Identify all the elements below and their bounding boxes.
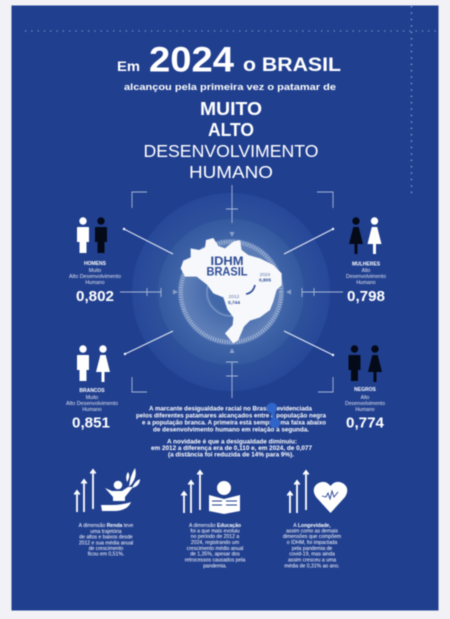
title: Em: [117, 59, 140, 74]
description: [79, 523, 133, 558]
overlay dots: [267, 403, 280, 428]
group: homens: 0,802: [76, 288, 114, 305]
icon: rising arrows: [287, 471, 309, 513]
connector lines: [124, 229, 333, 355]
map label: [206, 256, 248, 278]
text block: racial inequality: de desenvolvimento humano em relação à segunda.: [153, 426, 309, 434]
icon: heart with pulse: [314, 482, 347, 513]
description: pela pandemia de: [292, 546, 332, 552]
description: ficou em 0,51%.: [88, 552, 124, 558]
description: dimensões que compõem: [283, 534, 341, 540]
group: brancos: Muito: [86, 395, 98, 401]
dimension: educação: [181, 471, 245, 570]
2012 value: 0,744: [228, 300, 240, 306]
description: média de 0,31% ao ano.: [284, 564, 340, 570]
description: A Longevidade,: [293, 523, 331, 529]
2024 value: 0,805: [259, 278, 271, 284]
group: mulheres: Desenvolvimento: [346, 274, 386, 280]
description: uma trajetória: [90, 529, 122, 535]
description: o IDHM, foi impactada: [287, 540, 337, 546]
title: 2024: [149, 40, 235, 80]
icon: woman and woman: [349, 217, 382, 254]
icon: hand with plant: [101, 468, 140, 511]
2024 value: 2024: [260, 272, 271, 278]
headline: muito alto desenvolvimento humano: HUMANO: [189, 162, 273, 182]
description: [185, 523, 245, 570]
target rings chart: [120, 185, 343, 398]
group: brancos: BRANCOS: [79, 388, 105, 394]
text block: racial inequality: pelos diferentes patamares alcançados entre a população negra: [136, 412, 327, 420]
group: brancos: 0,851: [72, 414, 110, 432]
headline: muito alto desenvolvimento humano: ALTO: [208, 120, 254, 140]
2012 value: 2012: [229, 294, 240, 300]
icon: rising arrows: [74, 470, 96, 512]
icon: white man and woman: [77, 345, 110, 382]
icon: man and man: [77, 217, 107, 253]
group: homens: Humano: [85, 280, 105, 286]
description: pandemia.: [203, 564, 227, 570]
group: negros: Desenvolvimento: [345, 401, 385, 407]
growth arrow: [246, 285, 255, 294]
subtitle: alcançou pela primeira vez o patamar de: [124, 82, 336, 93]
group: mulheres: Alto: [362, 268, 371, 274]
headline: muito alto desenvolvimento humano: [144, 99, 318, 182]
description: 2024, registrando um: [191, 540, 239, 546]
2012 value: [228, 294, 240, 306]
title: [117, 40, 341, 93]
description: covid-19, mas ainda: [289, 552, 335, 558]
description: retrocessos causados pela: [185, 558, 245, 564]
dimension: longevidade: [283, 471, 347, 570]
text block: racial inequality: e a população branca. A primeira está sempre uma faixa abaixo: [142, 420, 326, 426]
headline: muito alto desenvolvimento humano: DESENVOLVIMENTO: [144, 141, 318, 161]
group: negros: 0,774: [346, 414, 385, 432]
map of Brazil: [181, 238, 282, 343]
headline: muito alto desenvolvimento humano: MUITO: [200, 99, 262, 119]
group: mulheres: 0,798: [347, 288, 385, 305]
group: mulheres: MULHERES: [352, 262, 381, 268]
text block: racial inequality: A marcante desigualdade racial no Brasil é evidenciada: [149, 406, 313, 412]
group: homens: [69, 217, 121, 305]
group: homens: Alto Desenvolvimento: [69, 274, 121, 280]
group: homens: HOMENS: [84, 261, 107, 267]
dotted guide lines: [25, 6, 438, 196]
group: brancos: Humano: [82, 407, 102, 413]
icon: black man and woman: [348, 345, 382, 382]
group: negros: [345, 345, 385, 432]
group: negros: Humano: [355, 407, 375, 413]
text block: racial inequality: em 2012 a diferença era de 0,110 e, em 2024, de 0,077: [151, 445, 313, 452]
group: homens: Muito: [89, 268, 101, 274]
crosshair ticks: [120, 185, 343, 398]
group: negros: Alto: [361, 395, 370, 401]
text block: racial inequality: A novidade é que a desigualdade diminuiu:: [167, 438, 297, 446]
title: o BRASIL: [243, 55, 341, 76]
description: assim cresceu a uma: [288, 558, 336, 564]
group: negros: NEGROS: [354, 387, 376, 393]
text block: racial inequality: (a distância foi reduzida de 14% para 9%).: [168, 452, 294, 458]
group: mulheres: [346, 217, 386, 305]
description: foi a que mais evoluiu: [190, 528, 240, 534]
description: crescimento médio anual: [187, 546, 243, 552]
group: brancos: [66, 345, 118, 432]
map label: IDHM: [210, 256, 244, 268]
description: A dimensão Educação: [189, 523, 241, 529]
description: de crescimento: [89, 546, 123, 552]
map label: BRASIL: [206, 266, 248, 278]
description: A dimensão Renda teve: [79, 523, 133, 529]
description: assim como as demais: [286, 528, 338, 534]
description: [283, 523, 341, 570]
description: no período de 2012 a: [191, 534, 239, 540]
description: de 1,35%, apesar dos: [190, 552, 240, 558]
group: mulheres: Humano: [356, 280, 376, 286]
description: 2012 e sua média anual: [79, 540, 133, 546]
icon: person reading book: [209, 481, 240, 514]
2024 value: [259, 272, 271, 284]
icon: rising arrows: [181, 471, 203, 513]
description: de altos e baixos desde: [79, 534, 133, 540]
group: brancos: Alto Desenvolvimento: [66, 401, 118, 407]
dimension: renda: [74, 468, 140, 558]
text block: racial inequality: [136, 406, 327, 458]
